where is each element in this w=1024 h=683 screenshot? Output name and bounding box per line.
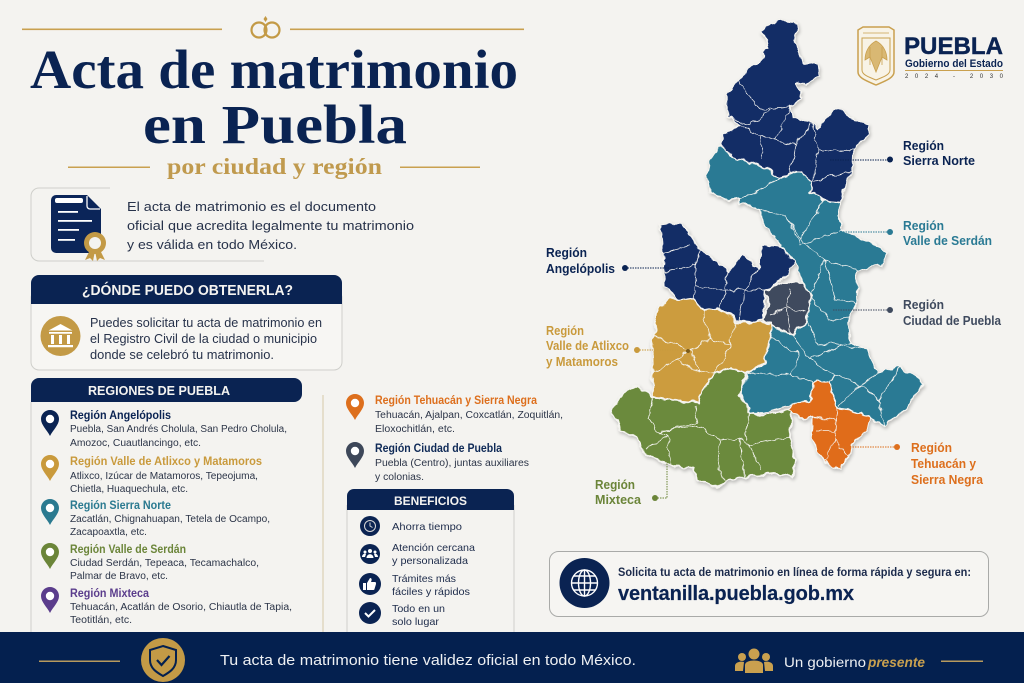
heading bar: BENEFICIOS [394, 494, 467, 508]
map region: Mixteca green [612, 368, 795, 488]
panel: intro [31, 188, 414, 261]
label: Sierra Norte [830, 139, 975, 168]
benefit: trámites fáciles: fáciles y rápidos [392, 586, 470, 598]
label: Valle de Atlixco y Matamoros [546, 324, 690, 369]
label: Valle de Serdán: Valle de Serdán [903, 234, 992, 248]
icon: people [735, 648, 773, 673]
benefit: todo en un lugar [359, 602, 445, 628]
logo: Puebla government: 2024 - 2030 [905, 74, 1004, 80]
benefit: atención cercana [360, 542, 475, 567]
heading bar [347, 489, 514, 510]
panel: regiones de puebla [31, 378, 563, 632]
region: Valle de Atlixco y Matamoros: Región Valle de Atlixco y Matamoros [70, 456, 262, 468]
label: Mixteca: Mixteca [595, 493, 642, 507]
benefit: ahorra tiempo [360, 516, 462, 536]
label: Tehuacán y Sierra Negra [835, 441, 984, 487]
benefit: ahorra tiempo: Ahorra tiempo [392, 521, 462, 533]
heading bar: REGIONES DE PUEBLA [88, 383, 231, 398]
map region: Angelópolis navy [660, 223, 795, 322]
panel: donde obtenerla [31, 275, 342, 370]
region: Mixteca: Tehuacán, Acatlán de Osorio, Chiautla de Tapia, [70, 602, 292, 613]
map region: Sierra Norte navy [720, 20, 870, 202]
region: Valle de Atlixco y Matamoros: Atlixco, Izúcar de Matamoros, Tepeojuma, [70, 471, 258, 482]
title: Acta de matrimonio [30, 39, 518, 100]
region: Valle de Serdán: Palmar de Bravo, etc. [70, 571, 168, 582]
logo: Puebla government [858, 27, 1004, 85]
region: Valle de Atlixco y Matamoros [41, 455, 262, 495]
region: Ciudad de Puebla [346, 442, 529, 483]
map region: Tehuacán orange [788, 380, 870, 470]
label: Angelópolis [546, 246, 680, 276]
text: el Registro Civil de la ciudad o municipio [90, 331, 317, 346]
title [30, 39, 518, 155]
region: Tehuacán y Sierra Negra: Eloxochitlán, etc. [375, 424, 455, 435]
label: Mixteca [595, 450, 667, 507]
label: Angelópolis: Angelópolis [546, 262, 615, 276]
heading bar [31, 275, 342, 304]
region: Sierra Norte: Zacapoaxtla, etc. [70, 527, 147, 538]
region: Tehuacán y Sierra Negra: Región Tehuacán y Sierra Negra [375, 395, 538, 407]
region: Valle de Serdán [41, 543, 259, 582]
header ornament: rings and rules [22, 16, 524, 38]
callout: ventanilla online: Solicita tu acta de matrimonio en línea de forma rápida y segura en: [618, 567, 971, 579]
icon: document with seal [51, 195, 106, 261]
region: Angelópolis: Amozoc, Cuautlancingo, etc. [70, 438, 201, 449]
intro text: y es válida en todo México. [127, 237, 297, 252]
icon: coat of arms [858, 27, 894, 85]
footer band: Un gobierno [784, 654, 866, 670]
icon: civil registry building [40, 316, 80, 356]
icon: globe [560, 558, 610, 608]
benefit: atención cercana: Atención cercana [392, 542, 475, 554]
region: Tehuacán y Sierra Negra: Tehuacán, Ajalpan, Coxcatlán, Zoquitlán, [375, 410, 563, 421]
region: Valle de Atlixco y Matamoros: Chietla, Huaquechula, etc. [70, 484, 188, 495]
region: Valle de Serdán: Ciudad Serdán, Tepeaca, Tecamachalco, [70, 558, 259, 569]
map region: teal centre [707, 145, 925, 425]
benefit: trámites fáciles [359, 573, 470, 598]
label: Ciudad de Puebla: Ciudad de Puebla [903, 314, 1002, 328]
label: Valle de Serdán [823, 219, 992, 248]
region: Mixteca: Región Mixteca [70, 588, 150, 600]
title: en Puebla [143, 94, 407, 155]
text [90, 315, 322, 362]
logo: Puebla government: Gobierno del Estado [905, 58, 1003, 70]
region: Mixteca [41, 587, 292, 626]
label: Tehuacán y Sierra Negra: Sierra Negra [911, 473, 984, 487]
label: Tehuacán y Sierra Negra: Tehuacán y [911, 457, 976, 471]
icon: gold shield badge [141, 638, 185, 682]
region: Sierra Norte: Región Sierra Norte [70, 500, 171, 512]
region: Mixteca: Teotitlán, etc. [70, 615, 132, 626]
map region: Atlixco gold [652, 297, 772, 402]
region: Ciudad de Puebla: Región Ciudad de Puebla [375, 443, 503, 455]
intro text [127, 199, 414, 252]
region: Angelópolis: Puebla, San Andrés Cholula, San Pedro Cholula, [70, 424, 287, 435]
footer band: Tu acta de matrimonio tiene validez oficial en todo México. [220, 652, 636, 669]
region: Valle de Serdán: Región Valle de Serdán [70, 544, 186, 556]
heading bar: ¿DÓNDE PUEDO OBTENERLA? [82, 281, 293, 299]
label: Valle de Atlixco y Matamoros: Región [546, 324, 584, 338]
label: Ciudad de Puebla [833, 298, 1002, 328]
label: Sierra Norte: Sierra Norte [903, 154, 975, 168]
label: Valle de Atlixco y Matamoros: Valle de Atlixco [546, 339, 629, 353]
region: Sierra Norte [41, 499, 270, 538]
benefit: trámites fáciles: Trámites más [392, 573, 456, 585]
region: Ciudad de Puebla: y colonias. [375, 472, 424, 483]
label: Ciudad de Puebla: Región [903, 298, 944, 312]
intro text: El acta de matrimonio es el documento [127, 199, 376, 214]
panel: beneficios [347, 489, 514, 632]
label: Mixteca: Región [595, 478, 635, 492]
region: Sierra Norte: Zacatlán, Chignahuapan, Tetela de Ocampo, [70, 514, 270, 525]
intro text: oficial que acredita legalmente tu matrimonio [127, 218, 414, 233]
region: Ciudad de Puebla: Puebla (Centro), juntas auxiliares [375, 458, 529, 469]
footer band [0, 632, 1024, 683]
benefit: todo en un lugar: Todo en un [392, 603, 445, 615]
footer band: presente [867, 654, 925, 670]
text: Puedes solicitar tu acta de matrimonio en [90, 315, 322, 330]
subtitle: por ciudad y región [167, 154, 382, 179]
callout: ventanilla online: ventanilla.puebla.gob.mx [618, 583, 854, 605]
text: donde se celebró tu matrimonio. [90, 347, 274, 362]
map of Puebla regions [612, 20, 925, 488]
callout: ventanilla online [550, 552, 988, 616]
label: Valle de Atlixco y Matamoros: y Matamoros [546, 355, 618, 369]
heading bar [31, 378, 302, 402]
label: Valle de Serdán: Región [903, 219, 944, 233]
benefit: todo en un lugar: solo lugar [392, 616, 440, 628]
label: Sierra Norte: Región [903, 139, 944, 153]
logo: Puebla government: PUEBLA [904, 33, 1003, 60]
map region: Ciudad de Puebla grey [763, 283, 811, 335]
region: Tehuacán y Sierra Negra [346, 394, 563, 435]
label: Angelópolis: Región [546, 246, 587, 260]
region: Angelópolis: Región Angelópolis [70, 410, 171, 422]
label: Tehuacán y Sierra Negra: Región [911, 441, 952, 455]
region: Angelópolis [41, 410, 287, 449]
benefit: atención cercana: y personalizada [392, 555, 468, 567]
